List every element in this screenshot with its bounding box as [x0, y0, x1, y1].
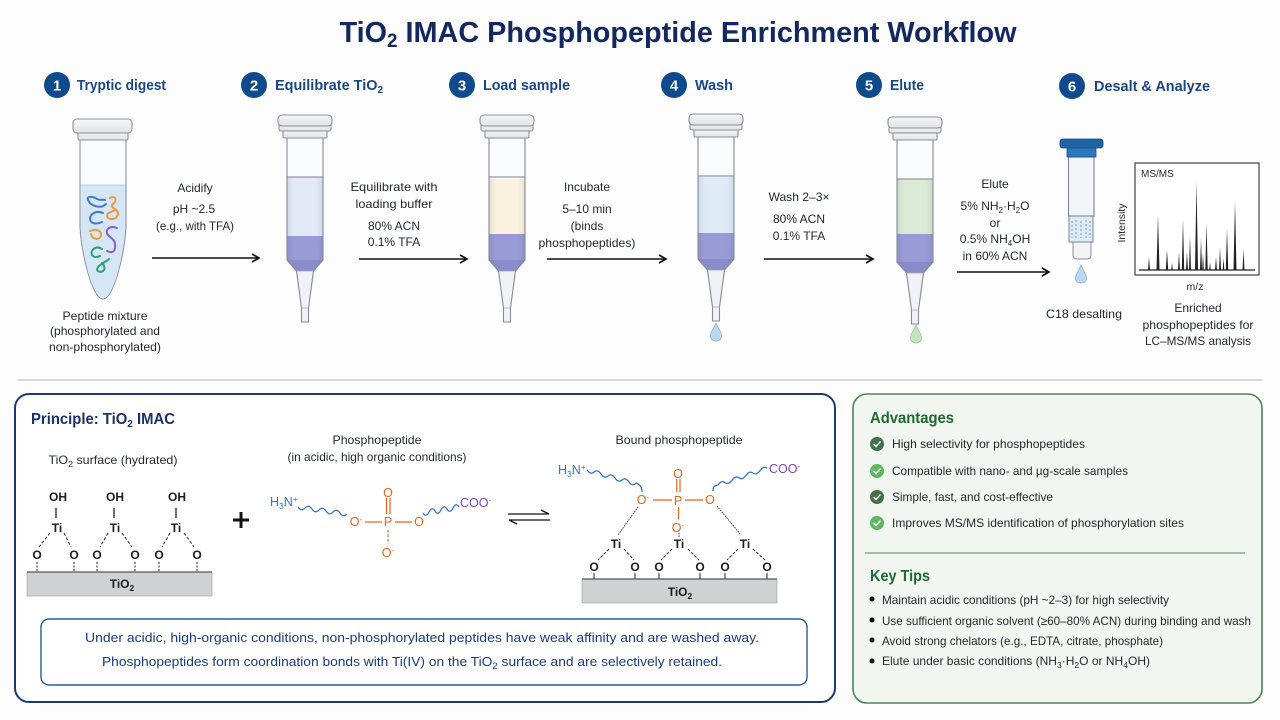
diagram: hydrated TiO2 surface: O: [130, 548, 140, 562]
diagram: hydrated TiO2 surface: Ti: [110, 521, 120, 535]
step 6 header: Desalt & Analyze: [1094, 79, 1210, 95]
icon: wash drop: [710, 323, 722, 341]
step 5 header: 5: [865, 78, 873, 94]
arrow 5 label: in 60% ACN: [963, 249, 1027, 263]
title: TiO: [340, 17, 387, 49]
arrow 2 label: Equilibrate with: [350, 180, 438, 194]
icon: C18 desalting tip: [1060, 139, 1103, 259]
diagram: hydrated TiO2 surface: O: [192, 548, 202, 562]
advantages heading: Advantages: [870, 410, 954, 427]
diagram: bound phosphopeptide on TiO2: O: [637, 493, 647, 507]
tip 4: ·H: [1062, 654, 1074, 668]
arrow 2 label: 0.1% TFA: [368, 235, 420, 249]
step 3 header: 3: [458, 78, 466, 94]
diagram: bound phosphopeptide on TiO2: H: [558, 463, 567, 477]
arrow 4 label: Wash 2–3×: [768, 190, 830, 204]
principle heading: Principle: TiO: [31, 411, 132, 428]
arrow 5 label: 0.5% NH: [960, 232, 1008, 246]
TiO2 surface label: 2: [68, 459, 73, 469]
diagram: phosphopeptide structure: -: [392, 546, 395, 555]
spectrum caption: LC–MS/MS analysis: [1145, 334, 1251, 348]
diagram: hydrated TiO2 surface: O: [69, 548, 79, 562]
diagram: hydrated TiO2 surface: TiO: [110, 577, 130, 591]
plus sign: [233, 512, 249, 528]
step 5 header: Elute: [890, 78, 924, 94]
step 2 header: [241, 72, 383, 98]
diagram: bound phosphopeptide on TiO2: O: [762, 560, 772, 574]
arrow 3 label: (binds: [571, 219, 603, 233]
icon: TiO2 column washed: [689, 114, 743, 321]
diagram: bound phosphopeptide on TiO2: O: [654, 560, 664, 574]
callout: principle summary: Phosphopeptides form coordination bonds with Ti(IV) on the TiO: [102, 654, 465, 669]
step 1 header: 1: [53, 78, 61, 94]
diagram: bound phosphopeptide on TiO2: O: [720, 560, 730, 574]
arrow 5 label: O: [1020, 199, 1029, 213]
arrow 2 label: loading buffer: [356, 197, 432, 211]
arrow 1 label: [156, 181, 234, 233]
diagram: bound phosphopeptide on TiO2: Ti: [740, 537, 750, 551]
phosphopeptide label: Phosphopeptide: [332, 433, 422, 447]
diagram: bound phosphopeptide on TiO2: -: [682, 521, 685, 530]
arrow 5 label: 5% NH: [961, 199, 999, 213]
arrow 5 label: ·H: [1003, 199, 1016, 213]
diagram: bound phosphopeptide on TiO2: -: [797, 462, 800, 471]
principle heading: 2: [127, 418, 133, 430]
tube caption: Peptide mixture: [62, 309, 148, 323]
panel: principle: [15, 394, 835, 702]
arrow 2 label: [350, 180, 438, 249]
arrow 1 label: Acidify: [177, 181, 213, 195]
step 3 header: Load sample: [483, 78, 570, 94]
advantage item 1: High selectivity for phosphopeptides: [892, 437, 1085, 451]
callout: principle summary: [41, 619, 807, 685]
diagram: phosphopeptide structure: O: [383, 486, 393, 500]
arrow 4 label: [768, 190, 830, 243]
diagram: phosphopeptide structure: O: [350, 515, 360, 529]
diagram: phosphopeptide structure: H: [270, 495, 279, 509]
diagram: hydrated TiO2 surface: O: [92, 548, 102, 562]
MS/MS spectrum chart: m/z: [1187, 281, 1203, 293]
diagram: phosphopeptide structure: COO: [460, 496, 488, 510]
arrow 5 label: OH: [1012, 232, 1030, 246]
equilibrium arrows: [508, 510, 550, 524]
icon: TiO2 column eluting: [888, 117, 942, 324]
diagram: hydrated TiO2 surface: O: [154, 548, 164, 562]
diagram: bound phosphopeptide on TiO2: Ti: [674, 537, 684, 551]
diagram: phosphopeptide structure: 3: [279, 501, 284, 511]
arrow 5 label: 2: [1016, 206, 1021, 215]
callout: principle summary: 2: [492, 661, 498, 671]
diagram: phosphopeptide structure: O: [382, 546, 392, 560]
arrow 4 label: 0.1% TFA: [773, 229, 825, 243]
diagram: phosphopeptide structure: +: [293, 494, 298, 504]
step 5 header: [856, 72, 924, 98]
panel: advantages and key tips: [853, 394, 1262, 703]
diagram: phosphopeptide structure: P: [384, 515, 392, 529]
bound phosphopeptide label: Bound phosphopeptide: [616, 433, 743, 447]
TiO2 surface label: TiO: [48, 453, 67, 467]
diagram: bound phosphopeptide on TiO2: 2: [688, 591, 693, 601]
icon: TiO2 column equilibrated: [278, 115, 332, 322]
diagram: bound phosphopeptide on TiO2: Ti: [611, 537, 621, 551]
arrow 5 label: 4: [1008, 239, 1013, 248]
icon: eluate drop: [910, 325, 922, 343]
diagram: hydrated TiO2 surface: OH: [49, 490, 67, 504]
tip 4: 2: [1074, 660, 1079, 670]
MS/MS spectrum chart: [1116, 163, 1259, 293]
tip 2: Use sufficient organic solvent (≥60–80% ACN) during binding and wash: [882, 614, 1251, 628]
diagram: bound phosphopeptide on TiO2: COO: [769, 462, 797, 476]
tube caption: (phosphorylated and: [50, 324, 160, 338]
arrow 1 label: pH ~2.5: [173, 202, 216, 216]
step 6 header: [1059, 73, 1210, 99]
tip 4: [870, 654, 1150, 670]
principle heading: IMAC: [133, 411, 175, 428]
diagram: bound phosphopeptide on TiO2: 3: [567, 469, 572, 479]
tip 4: OH): [1128, 654, 1150, 668]
spectrum caption: phosphopeptides for: [1142, 318, 1254, 332]
MS/MS spectrum chart: Intensity: [1116, 203, 1128, 243]
tip 4: 3: [1057, 660, 1062, 670]
diagram: hydrated TiO2 surface: OH: [106, 490, 124, 504]
diagram: phosphopeptide structure: -: [488, 496, 491, 505]
diagram: hydrated TiO2 surface: Ti: [171, 521, 181, 535]
arrow 3 label: Incubate: [564, 180, 610, 194]
step 2 header: 2: [250, 78, 258, 94]
advantage item 2: Compatible with nano- and µg-scale samples: [892, 464, 1128, 478]
step 4 header: Wash: [695, 78, 733, 94]
diagram: phosphopeptide structure: [270, 486, 491, 560]
arrow 1: [152, 257, 259, 259]
step 1 header: [44, 72, 166, 98]
arrow 5 label: Elute: [981, 177, 1009, 191]
arrow 4: [764, 258, 873, 260]
callout: principle summary: surface and are selectively retained.: [498, 654, 722, 669]
diagram: bound phosphopeptide on TiO2: TiO: [668, 585, 688, 599]
arrow 3 label: phosphopeptides): [538, 236, 636, 250]
arrow 2 label: 80% ACN: [368, 219, 420, 233]
diagram: hydrated TiO2 surface: Ti: [52, 521, 62, 535]
diagram: phosphopeptide structure: N: [284, 495, 293, 509]
tip 3: Avoid strong chelators (e.g., EDTA, citrate, phosphate): [882, 634, 1163, 648]
step 6 header: 6: [1068, 78, 1076, 96]
arrow 4 label: 80% ACN: [773, 212, 825, 226]
icon: microcentrifuge tube with peptide mixture: [73, 119, 132, 299]
tip 4: O or NH: [1079, 654, 1123, 668]
diagram: bound phosphopeptide on TiO2: N: [572, 463, 581, 477]
diagram: phosphopeptide structure: O: [414, 515, 424, 529]
step 1 header: Tryptic digest: [77, 78, 166, 94]
step 2 header: Equilibrate TiO: [275, 78, 378, 94]
arrow 3: [547, 258, 666, 260]
arrow 1 label: (e.g., with TFA): [156, 219, 234, 233]
tip 1: Maintain acidic conditions (pH ~2–3) for high selectivity: [882, 593, 1169, 607]
advantage item 4: Improves MS/MS identification of phosphorylation sites: [892, 516, 1184, 530]
title: 2: [387, 31, 398, 52]
diagram: hydrated TiO2 surface: OH: [168, 490, 186, 504]
arrow 3 label: [538, 180, 636, 250]
diagram: bound phosphopeptide on TiO2: O: [695, 560, 705, 574]
TiO2 surface label: surface (hydrated): [73, 453, 178, 467]
step 4 header: [661, 72, 733, 98]
diagram: hydrated TiO2 surface: 2: [130, 583, 135, 593]
tube caption: non-phosphorylated): [49, 340, 161, 354]
step 3 header: [449, 72, 570, 98]
tube caption: [49, 309, 161, 354]
tip 4: Elute under basic conditions (NH: [882, 654, 1057, 668]
icon: TiO2 column loaded: [480, 115, 534, 322]
arrow 5 label: 2: [999, 206, 1004, 215]
icon: C18 drop: [1076, 265, 1086, 283]
tip 4: 4: [1123, 660, 1128, 670]
arrow 2: [359, 258, 467, 260]
diagram: bound phosphopeptide on TiO2: O: [705, 493, 715, 507]
key tips heading: Key Tips: [870, 568, 930, 585]
diagram: bound phosphopeptide on TiO2: O: [672, 521, 682, 535]
MS/MS spectrum chart: MS/MS: [1141, 169, 1174, 180]
diagram: bound phosphopeptide on TiO2: +: [581, 462, 586, 472]
arrow 3 label: 5–10 min: [562, 202, 612, 216]
arrow 5 label: or: [990, 216, 1000, 230]
diagram: bound phosphopeptide on TiO2: [558, 462, 800, 603]
callout: principle summary: Under acidic, high-organic conditions, non-phosphorylated peptides have weak affinity and are washed away.: [85, 630, 759, 645]
step 2 header: 2: [377, 85, 383, 96]
title: IMAC Phosphopeptide Enrichment Workflow: [398, 17, 1017, 49]
diagram: bound phosphopeptide on TiO2: O: [630, 560, 640, 574]
diagram: hydrated TiO2 surface: [27, 490, 212, 596]
diagram: bound phosphopeptide on TiO2: -: [647, 493, 650, 502]
arrow 5: [957, 271, 1049, 273]
arrow 5 label: [960, 177, 1030, 263]
phosphopeptide label: [288, 433, 466, 464]
spectrum caption: [1142, 301, 1254, 348]
C18 caption: C18 desalting: [1046, 307, 1122, 321]
spectrum caption: Enriched: [1174, 301, 1222, 315]
diagram: bound phosphopeptide on TiO2: P: [674, 494, 682, 508]
advantage item 3: Simple, fast, and cost-effective: [892, 490, 1053, 504]
diagram: bound phosphopeptide on TiO2: O: [589, 560, 599, 574]
step 4 header: 4: [670, 78, 679, 94]
diagram: bound phosphopeptide on TiO2: O: [673, 467, 683, 481]
diagram: hydrated TiO2 surface: O: [32, 548, 42, 562]
diagram: phosphopeptide structure: -: [360, 515, 363, 524]
phosphopeptide label: (in acidic, high organic conditions): [288, 450, 466, 464]
